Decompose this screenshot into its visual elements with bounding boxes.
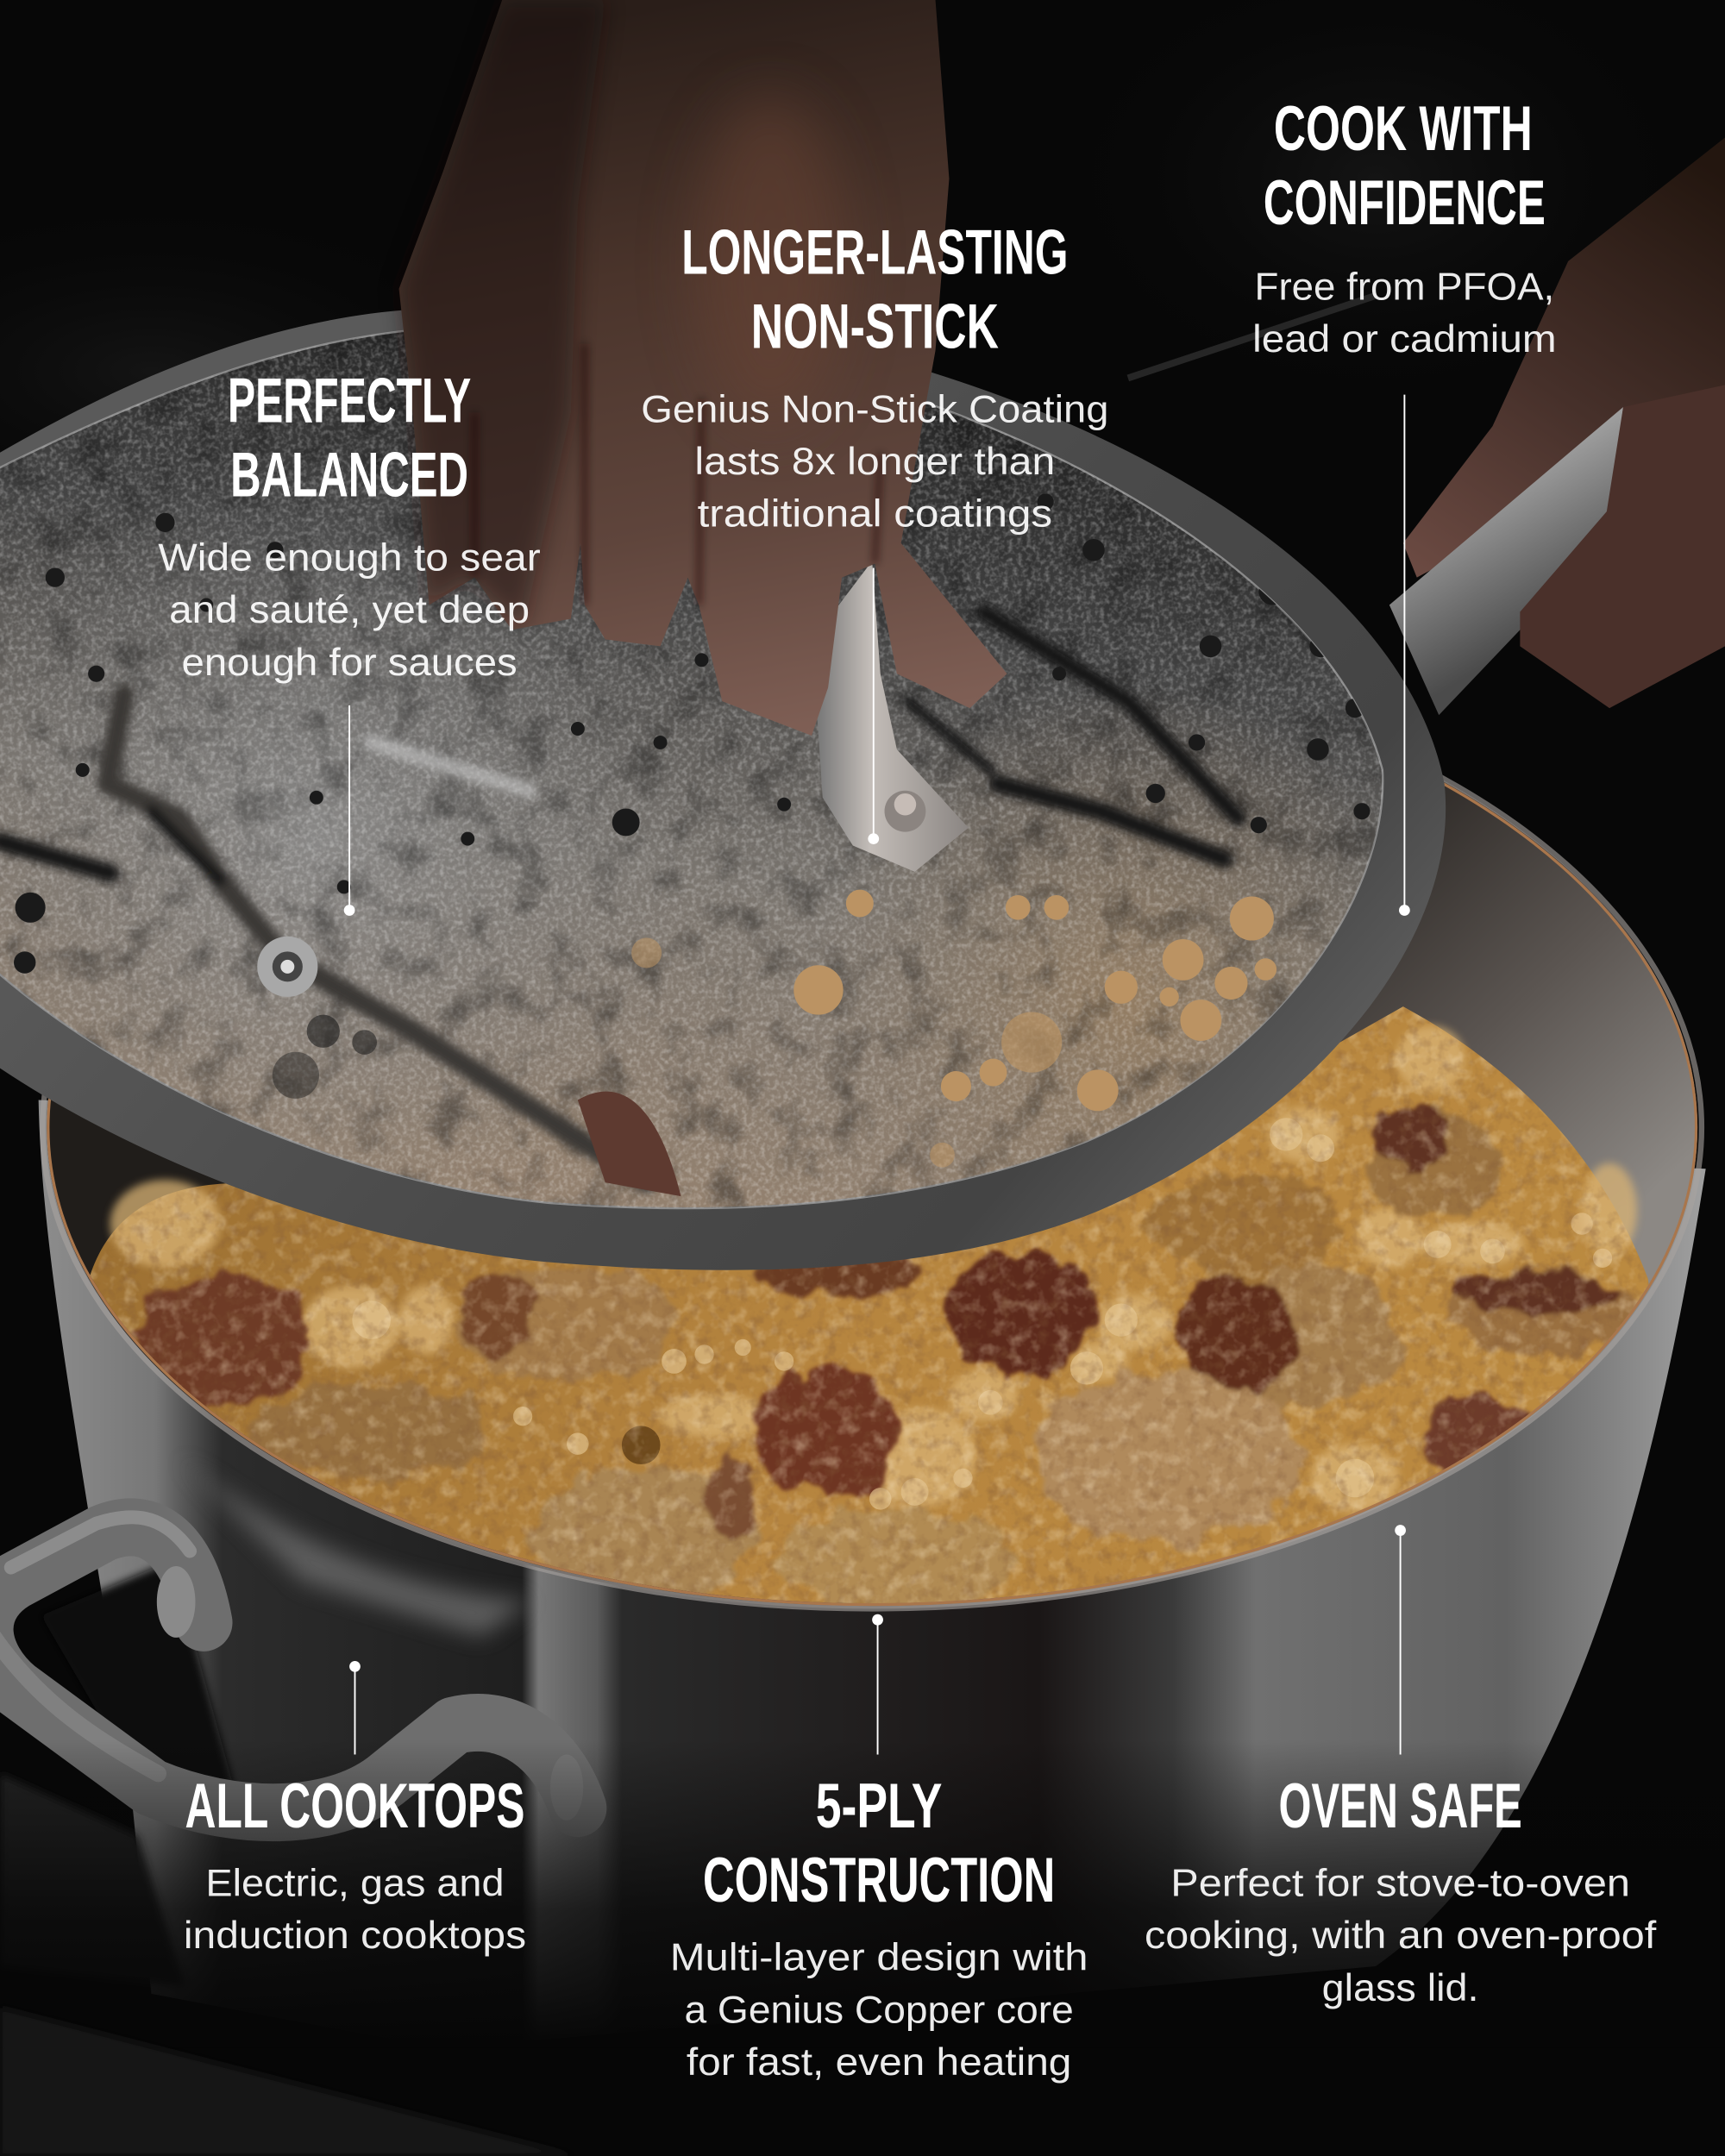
pan loop handle <box>0 1517 583 1821</box>
leader line and dot: all cooktops <box>349 1661 361 1754</box>
hand on pan handle <box>1403 137 1725 578</box>
callout: longer-lasting non-stick: lasts 8x longer than <box>694 441 1055 483</box>
callout: perfectly balanced: and sauté, yet deep <box>169 589 530 631</box>
leader line and dot: 5-ply <box>872 1614 883 1754</box>
callout: perfectly balanced: Wide enough to sear <box>158 537 541 580</box>
large bubbles <box>110 1025 1637 1513</box>
rivets <box>157 1566 195 1638</box>
dark opening inside pan loop handle <box>41 1561 234 1788</box>
callout: 5-ply construction: 5-PLY <box>816 1771 943 1841</box>
hand lifting lid <box>399 0 1007 736</box>
condensation streaks <box>0 578 1311 1198</box>
lid knob handle <box>817 561 969 872</box>
lid steel rim <box>0 306 1446 1270</box>
small bubbles <box>352 1118 1612 1510</box>
callout: oven safe: Perfect for stove-to-oven <box>1170 1863 1630 1905</box>
knuckle glow <box>694 97 846 426</box>
callout: perfectly balanced: enough for sauces <box>182 642 518 684</box>
callout: cook with confidence <box>1252 93 1557 360</box>
pan rim <box>42 646 1702 1608</box>
hand shadow side <box>399 0 605 630</box>
reflection of meatball in glass <box>578 1092 681 1196</box>
leader line and dot: lid balance <box>344 705 354 916</box>
hole in sauce <box>622 1426 661 1464</box>
callout: perfectly balanced <box>158 365 541 684</box>
callout: longer-lasting non-stick: NON-STICK <box>751 291 999 361</box>
lid rivet <box>257 937 317 997</box>
sauce and meatballs <box>50 1006 1649 1603</box>
callout: perfectly balanced: BALANCED <box>230 440 468 511</box>
lower palm of right hand <box>1520 385 1725 708</box>
amber droplets <box>631 890 1276 1168</box>
dark droplets <box>14 405 1371 1099</box>
glass lid <box>0 303 1446 1270</box>
pan long handle <box>1389 407 1623 715</box>
callout: longer-lasting non-stick: Genius Non-Stick Coating <box>641 388 1108 430</box>
callout: cook with confidence: CONFIDENCE <box>1264 167 1546 238</box>
finger gaps <box>474 344 881 605</box>
darkening at bottom of pan <box>0 1739 1725 2049</box>
pan exterior <box>39 1100 1706 2049</box>
callout: all cooktops: induction cooktops <box>184 1915 526 1957</box>
callout: oven safe: cooking, with an oven-proof <box>1145 1915 1657 1957</box>
meatballs <box>137 1113 1640 1613</box>
callout: 5-ply construction: Multi-layer design with <box>670 1937 1088 1979</box>
callout: longer-lasting non-stick: traditional coatings <box>698 493 1052 536</box>
callout: all cooktops: ALL COOKTOPS <box>185 1771 524 1841</box>
callout: all cooktops: Electric, gas and <box>205 1863 505 1905</box>
callout: all cooktops <box>184 1771 526 1957</box>
callout: longer-lasting non-stick <box>641 216 1108 536</box>
callout: 5-ply construction: CONSTRUCTION <box>703 1845 1055 1915</box>
callout: oven safe: OVEN SAFE <box>1278 1771 1522 1841</box>
callout: cook with confidence: lead or cadmium <box>1252 318 1557 360</box>
callout: 5-ply construction: for fast, even heating <box>687 2041 1071 2084</box>
callout: oven safe: glass lid. <box>1322 1967 1479 2009</box>
callout: longer-lasting non-stick: LONGER-LASTING <box>681 216 1068 287</box>
lid glass <box>0 327 1383 1208</box>
callout: cook with confidence: COOK WITH <box>1274 93 1533 164</box>
callout: cook with confidence: Free from PFOA, <box>1255 266 1554 309</box>
leader line and dot: non-stick <box>868 567 879 844</box>
lower-left pan reflection <box>0 1774 185 1987</box>
callout: 5-ply construction: a Genius Copper core <box>684 1989 1074 2031</box>
callout: oven safe <box>1145 1771 1657 2009</box>
callout: perfectly balanced: PERFECTLY <box>228 365 471 436</box>
callout: 5-ply construction <box>670 1771 1088 2084</box>
pan body highlight under rim <box>179 1457 530 1636</box>
pan interior wall <box>47 646 1697 1608</box>
leader line and dot: oven safe <box>1395 1525 1406 1754</box>
leader line and dot: confidence <box>1399 395 1410 916</box>
